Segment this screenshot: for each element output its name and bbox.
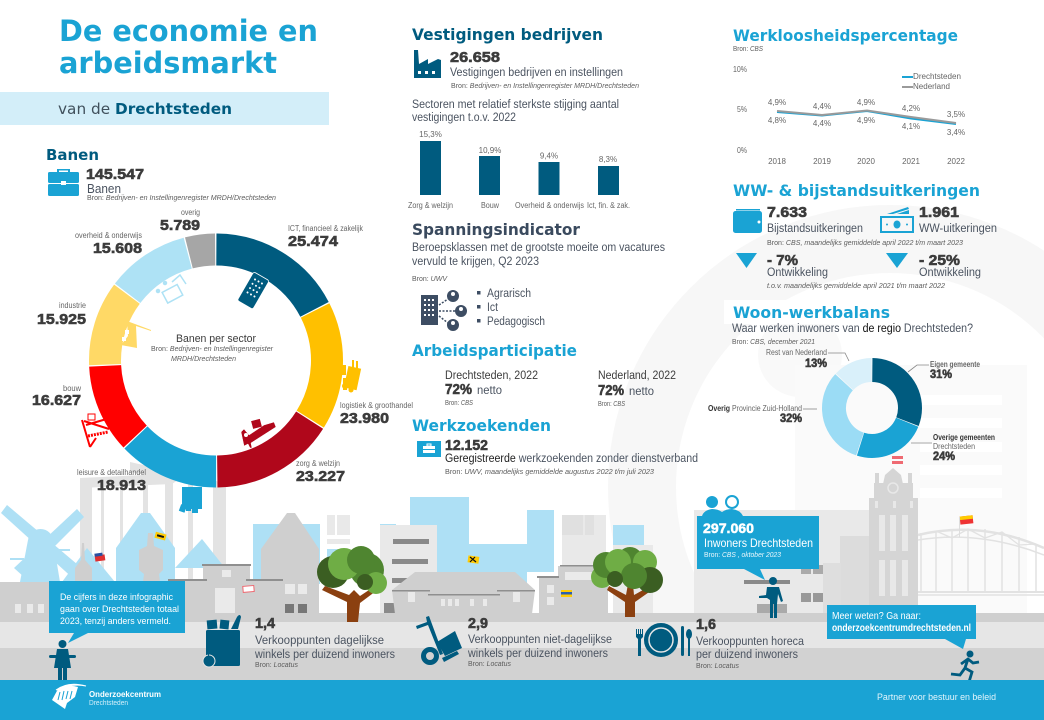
stat: job seekers: Geregistreerde werkzoekenden zonder dienstverband (445, 451, 698, 465)
logo: onderzoekcentrum: Drechtsteden (89, 698, 128, 707)
heading: werkzoekenden: Werkzoekenden (412, 416, 551, 435)
chart subtitle: vestigingen t.o.v. 2022 (412, 110, 516, 124)
logo: onderzoekcentrum (52, 684, 161, 709)
sector label: ict: 25.474 (288, 234, 338, 250)
bridge (918, 529, 1044, 595)
callout: website: onderzoekcentrumdrechtsteden.nl (832, 623, 971, 634)
line chart: 3,5% (947, 110, 965, 119)
title (59, 14, 318, 80)
heading: arbeidsparticipatie: Arbeidsparticipatie (412, 341, 577, 360)
total jobs: Banen (87, 182, 121, 196)
source: comparison: t.o.v. maandelijks gemiddelde april 2021 t/m maart 2022 (767, 281, 946, 290)
question: Bron: CBS, december 2021 (732, 337, 815, 346)
chart subtitle (412, 97, 619, 124)
callout: website: Meer weten? Ga naar: (832, 611, 921, 622)
bar chart: Overheid & onderwijs (515, 201, 584, 210)
line chart: 0% (737, 146, 747, 155)
label: overige gemeenten: Drechtsteden (933, 442, 975, 451)
label: overig zuid-holland (708, 404, 802, 425)
source: benefits: Bron: CBS, maandelijks gemiddelde april 2022 t/m maart 2023 (767, 238, 964, 247)
label: eigen gemeente: Eigen gemeente (930, 360, 980, 369)
stat: horeca: 1,6 (696, 617, 716, 633)
callout: scope note: 2023, tenzij anders vermeld. (60, 616, 171, 627)
question (732, 321, 973, 346)
line chart: 4,4% (813, 102, 831, 111)
sector label: overig: overig (181, 208, 200, 217)
icon: plate and cutlery (636, 625, 692, 656)
subtitle band: van de Drechtsteden (58, 100, 232, 118)
line chart: 2021 (902, 157, 920, 166)
line chart: 4,9% (857, 98, 875, 107)
stat: niet-dagelijkse winkels: Bron: Locatus (468, 659, 511, 668)
icon: man (759, 577, 783, 618)
callout: inhabitants: 297.060 (703, 520, 754, 536)
panel: ww en bijstand (733, 181, 997, 290)
stat: bijstand trend (767, 252, 828, 279)
sector label: ict: ICT, financieel & zakelijk (288, 224, 364, 233)
label: overig zuid-holland: 32% (780, 413, 802, 425)
sector label: overheid: overheid & onderwijs (75, 231, 142, 240)
icon: wallet (733, 209, 762, 233)
occupation list: Agrarisch (487, 286, 531, 300)
stat: ww trend (919, 252, 981, 279)
stat: job seekers: Bron: UWV, maandelijks gemiddelde augustus 2022 t/m juli 2023 (445, 467, 655, 476)
line chart: 2022 (947, 157, 965, 166)
line chart: 4,9% (768, 98, 786, 107)
stat: bijstand: Bijstandsuitkeringen (767, 221, 863, 235)
stat: nederland: 72% (598, 383, 624, 399)
source: cbs: Bron: CBS (733, 44, 763, 53)
sector label: bouw (32, 384, 81, 409)
panel: arbeidsparticipatie (412, 341, 676, 408)
sector label: bouw: bouw (63, 384, 81, 393)
stat: nederland: netto (629, 384, 654, 398)
sector label: logistiek (340, 401, 413, 427)
donut chart: jobs per sector (59, 204, 373, 517)
icon: briefcase tile (417, 441, 441, 457)
label: overige gemeenten: Overige gemeenten (933, 433, 995, 442)
heading: spanningsindicator: Spanningsindicator (412, 220, 580, 239)
line chart: 3,4% (947, 128, 965, 137)
heading: uitkeringen: WW- & bijstandsuitkeringen (733, 181, 980, 200)
callout: website (827, 605, 976, 649)
stat: ww: WW-uitkeringen (919, 221, 997, 235)
line chart: 2019 (813, 157, 831, 166)
bar chart: 9,4% (540, 152, 558, 160)
line chart: 10% (733, 65, 747, 74)
label: rest van nederland (766, 348, 827, 370)
total establishments (450, 50, 639, 90)
occupation list: Ict (487, 300, 498, 314)
panel: woon-werkbalans (708, 303, 995, 463)
panel: werkzoekenden (412, 416, 698, 476)
total jobs: Bron: Bedrijven- en Instellingenregister MRDH/Drechtsteden (87, 193, 276, 202)
description: Bron: UWV (412, 274, 448, 283)
sector label: leisure: 18.913 (97, 478, 146, 494)
callout: inhabitants: Inwoners Drechtsteden (704, 536, 813, 550)
bar chart: 10,9% (479, 146, 501, 155)
panel: banen (32, 146, 413, 517)
heading: woon-werkbalans: Woon-werkbalans (733, 303, 890, 322)
heading: banen: Banen (46, 146, 99, 164)
footer (0, 680, 1044, 720)
stat: drechtsteden: 72% (445, 382, 472, 398)
icon: phone (237, 272, 269, 309)
icon: grocery bag (203, 615, 241, 667)
question: Waar werken inwoners van de regio Drechtsteden? (732, 321, 973, 335)
stat: ww trend: - 25% (919, 252, 960, 269)
donut centre label: Banen per sector (176, 333, 256, 345)
tagline: Partner voor bestuur en beleid (877, 692, 996, 702)
label: overige gemeenten: 24% (933, 451, 955, 463)
stat: ww: 1.961 (919, 204, 959, 221)
background watermark (642, 239, 1044, 720)
sector label: overheid: 15.608 (93, 241, 142, 257)
sector label: industrie (37, 301, 86, 328)
stat: nederland: Nederland, 2022 (598, 368, 676, 382)
stat: drechtsteden (445, 368, 538, 407)
line chart: Drechtsteden (913, 72, 961, 81)
skyline (0, 456, 1044, 680)
line chart (733, 65, 965, 166)
callout: inhabitants: Bron: CBS , oktober 2023 (704, 550, 782, 559)
flags (94, 515, 973, 597)
label: rest van nederland: 13% (805, 358, 827, 370)
icon: factory (121, 321, 151, 348)
stat: niet-dagelijkse winkels (467, 616, 612, 668)
sector label: overig (160, 208, 200, 234)
stat: bijstand: 7.633 (767, 204, 807, 221)
chart subtitle: Sectoren met relatief sterkste stijging aantal (412, 97, 619, 111)
label: rest van nederland: Rest van Nederland (766, 348, 827, 357)
stat: dagelijkse winkels (254, 616, 395, 669)
stat: horeca: per duizend inwoners (696, 647, 798, 661)
stat: horeca: Bron: Locatus (696, 661, 739, 670)
sector label: industrie: industrie (59, 301, 86, 310)
line chart: Nederland (913, 82, 950, 91)
sector label: logistiek: logistiek & groothandel (340, 401, 413, 410)
stat: bijstand (767, 204, 863, 235)
total jobs: 145.547 (86, 167, 144, 183)
stat: job seekers (445, 438, 698, 476)
total jobs (86, 167, 276, 202)
icon: crane (82, 414, 110, 447)
sector label: overheid (75, 231, 142, 257)
icon: banknotes (881, 207, 913, 232)
sector label: leisure (77, 468, 146, 494)
title: arbeidsmarkt (59, 46, 277, 80)
occupation list (477, 286, 545, 328)
sector label: zorg: 23.227 (296, 469, 345, 485)
label: eigen gemeente (930, 360, 980, 381)
stat: nederland (598, 368, 676, 408)
bar chart: Bouw (481, 201, 499, 210)
donut centre label: MRDH/Drechtsteden (171, 354, 236, 363)
callout: scope note: gaan over Drechtsteden totaal (60, 604, 179, 615)
line chart: 2020 (857, 157, 875, 166)
icon: truck (341, 360, 361, 392)
icon: residents (702, 496, 743, 516)
icon: down triangle (886, 253, 908, 268)
sector label: bouw: 16.627 (32, 393, 81, 409)
stat: drechtsteden: netto (477, 383, 502, 397)
icon: runner (951, 650, 979, 682)
icon: hand trolley (416, 616, 462, 662)
church tower (823, 456, 918, 614)
line chart: 4,4% (813, 119, 831, 128)
tree 1 (317, 546, 387, 622)
stat: niet-dagelijkse winkels: 2,9 (468, 616, 488, 632)
donut chart: work location (818, 354, 926, 462)
stat: dagelijkse winkels: 1,4 (255, 616, 275, 632)
subtitle band (0, 92, 329, 125)
heading: werkloosheid: Werkloosheidspercentage (733, 26, 958, 45)
panel: werkloosheidspercentage (733, 26, 965, 166)
total establishments: 26.658 (450, 50, 500, 66)
bar chart: 8,3% (599, 155, 617, 164)
line chart: 4,2% (902, 104, 920, 113)
sector label: zorg (296, 459, 345, 485)
callout: scope note (49, 581, 185, 643)
icon: government (156, 275, 186, 303)
icon: leisure bag (179, 487, 202, 513)
stat: dagelijkse winkels: Bron: Locatus (255, 660, 298, 669)
icon: down triangle (736, 253, 757, 268)
stat: drechtsteden: Drechtsteden, 2022 (445, 368, 538, 382)
stat: nederland: Bron: CBS (598, 399, 625, 408)
icon: building and people (421, 290, 467, 331)
stat: horeca: Verkooppunten horeca (696, 634, 804, 648)
stat: niet-dagelijkse winkels: winkels per duizend inwoners (467, 646, 608, 660)
description: vervuld te krijgen, Q2 2023 (412, 254, 539, 268)
bar chart: Zorg & welzijn (408, 201, 453, 210)
sector label: ict (288, 224, 364, 250)
occupation list: Pedagogisch (487, 314, 545, 328)
stat: dagelijkse winkels: Verkooppunten dagelijkse (255, 633, 384, 647)
bar chart: 15,3% (419, 130, 442, 139)
total establishments: Vestigingen bedrijven en instellingen (450, 65, 623, 79)
stat: dagelijkse winkels: winkels per duizend inwoners (254, 647, 395, 661)
bar chart: Ict, fin. & zak. (587, 201, 630, 210)
label: overige gemeenten (933, 433, 995, 463)
title: De economie en (59, 14, 318, 48)
stat: ww trend: Ontwikkeling (919, 265, 981, 279)
line chart: 4,8% (768, 116, 786, 125)
stat: bijstand trend: - 7% (767, 252, 798, 269)
sector label: industrie: 15.925 (37, 312, 86, 328)
heading: vestigingen: Vestigingen bedrijven (412, 25, 603, 44)
stat: drechtsteden: Bron: CBS (445, 398, 473, 407)
stat: ww (919, 204, 997, 235)
description: Beroepsklassen met de grootste moeite om vacatures (412, 240, 665, 254)
callout: scope note: De cijfers in deze infographic (60, 592, 173, 603)
icon: briefcase (48, 169, 79, 196)
donut centre label (151, 333, 273, 363)
leader lines (803, 353, 932, 443)
stat: job seekers: 12.152 (445, 438, 488, 454)
street bands (0, 613, 1044, 680)
sector label: zorg: zorg & welzijn (296, 459, 340, 468)
line chart: 4,9% (857, 116, 875, 125)
tree 2 (591, 547, 663, 617)
label: overig zuid-holland: Overig Provincie Zuid-Holland (708, 404, 802, 413)
icon: factory (414, 50, 441, 78)
total establishments: Bron: Bedrijven- en Instellingenregister MRDH/Drechtsteden (451, 81, 639, 90)
stat: horeca (696, 617, 804, 670)
callout: inhabitants (697, 516, 819, 580)
logo: onderzoekcentrum: Onderzoekcentrum (89, 689, 161, 699)
panel: vestigingen bedrijven (408, 25, 639, 210)
icon: hospital bed (241, 419, 276, 448)
line chart: 2018 (768, 157, 786, 166)
icon: woman (49, 640, 76, 680)
bar chart (408, 130, 630, 210)
description (412, 240, 665, 283)
label: eigen gemeente: 31% (930, 369, 952, 381)
sector label: overig: 5.789 (160, 218, 200, 234)
panel: spanningsindicator (412, 220, 665, 331)
donut centre label: Bron: Bedrijven- en Instellingenregister (151, 344, 273, 353)
line chart: 5% (737, 105, 747, 114)
stat: niet-dagelijkse winkels: Verkooppunten niet-dagelijkse (468, 632, 612, 646)
sector label: logistiek: 23.980 (340, 411, 389, 427)
stat: bijstand trend: Ontwikkeling (767, 265, 828, 279)
sector label: leisure: leisure & detailhandel (77, 468, 146, 477)
line chart: 4,1% (902, 122, 920, 131)
